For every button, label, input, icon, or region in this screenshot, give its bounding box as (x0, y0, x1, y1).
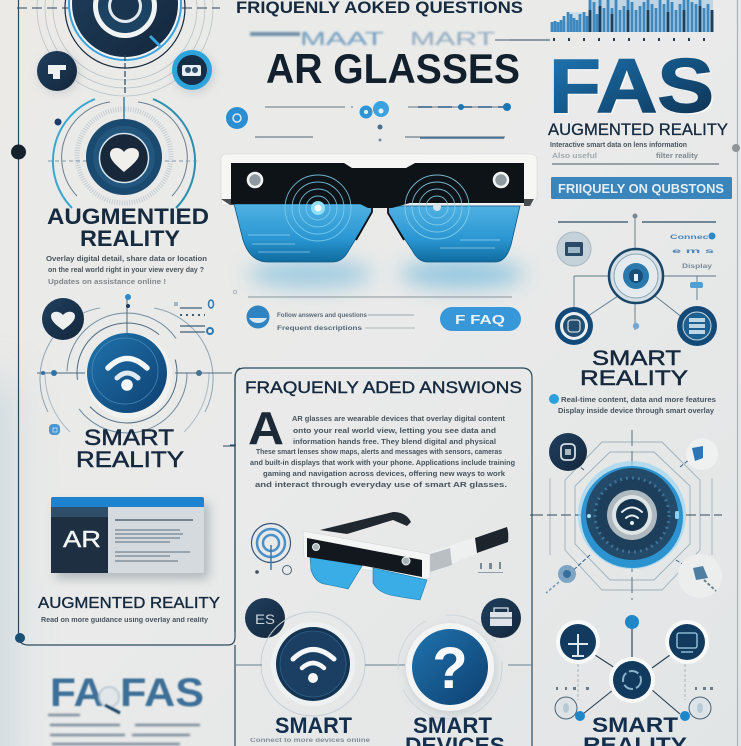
button: FAQ (440, 307, 521, 331)
heading: FAQ FAS: FA (50, 671, 104, 715)
heading: smart reality left: SMART (84, 425, 174, 450)
text block: answer paragraph: onto your real world view, letting you see data and (293, 426, 496, 435)
icon: ES badge (245, 598, 285, 638)
icon: pale monitor (557, 232, 591, 266)
drop capital A: A (248, 402, 284, 454)
heading: smart: SMART (275, 713, 353, 738)
lens data lines (248, 235, 500, 252)
icon: FAQ row disc (246, 306, 270, 328)
right lens (388, 206, 520, 262)
icon: smart reality wifi hub (37, 294, 232, 433)
glasses: small AR glasses (303, 512, 508, 600)
icon: hub badge pale bottom right (678, 554, 722, 598)
text block: augmented reality: Overlay digital detail, share data or location (46, 254, 207, 263)
nose bridge edges (356, 206, 404, 240)
text block: answer paragraph: AR glasses are wearable devices that overlay digital content (292, 414, 505, 423)
heading: augmented reality card: AUGMENTED REALITY (38, 595, 220, 612)
icon: right node (677, 306, 717, 346)
FAQ row (233, 290, 521, 332)
heading: smart devices (405, 713, 505, 746)
labels: network notes (670, 232, 716, 288)
text block: answer paragraph: and built-in displays that work with your phone. Applications include training (250, 458, 515, 467)
icon: drawer badge (481, 598, 521, 638)
icon: hub badge dark (549, 433, 587, 471)
hub circuitry (550, 442, 712, 590)
black band (307, 538, 422, 577)
diagram: bottom right network (555, 615, 713, 721)
heading: smart reality left: REALITY (76, 447, 184, 472)
heart hub rings (48, 97, 200, 208)
card text lines (115, 520, 193, 561)
banner: frequently questions: FRIIQUELY ON QUBSTONS (558, 182, 724, 196)
left holographic rings (285, 175, 351, 241)
text: smart caption: Connect to more devices online (250, 738, 371, 744)
frame node dots (11, 144, 740, 643)
icon: central lock (609, 249, 663, 303)
far temple (320, 512, 411, 534)
wifi symbol (108, 358, 147, 378)
button: FAQ: F FAQ (455, 312, 505, 327)
heading: augmented reality right: AUGMENTED REALITY (548, 120, 728, 139)
right holographic rings (405, 175, 469, 239)
text block: right: Interactive smart data on lens information (550, 140, 687, 149)
text block: FAQ FAS faint (48, 715, 200, 744)
heading: frequently answers: FRAQUENLY ADED ANSWIONS (245, 378, 522, 397)
heading: smart reality bottom right: SMART (592, 714, 678, 737)
labels: network notes: Connect (670, 234, 713, 241)
text block: answer paragraph (250, 414, 515, 489)
heading: smart reality left (76, 425, 184, 472)
tiny node labels (556, 687, 713, 690)
icon: ES badge: ES (255, 611, 275, 627)
heading: augmented reality: REALITY (80, 226, 180, 251)
faded subtitle: MAAT (300, 29, 384, 49)
heading: smart reality right: REALITY (580, 367, 688, 390)
icon: signal rings (252, 524, 292, 574)
small blue dots (54, 107, 248, 129)
icon: wifi disc (235, 612, 405, 716)
node: small left (555, 697, 585, 721)
heading: smart reality right: SMART (592, 347, 681, 370)
icon: smart hub bottom right (533, 430, 722, 600)
panel: top-left lens hub (17, 0, 220, 96)
text block: answer paragraph: These smart lenses show maps, alerts and messages with sensors, cameras (256, 447, 502, 456)
text block: augmented reality (46, 254, 207, 286)
hub scale lines (37, 0, 213, 96)
icon: small heart badge (42, 298, 84, 340)
text: FAQ row: Follow answers and questions (277, 312, 367, 319)
text block: answer paragraph: and interact through everyday use of smart AR glasses. (255, 480, 507, 489)
heading: FAS: FAS (549, 44, 714, 129)
text block: smart reality right: Real-time content, data and more features (561, 395, 716, 404)
icon: hub badge pale bottom left (546, 565, 576, 593)
text block: right: Also useful (552, 151, 597, 160)
text: FAQ row: Frequent descriptions (277, 325, 362, 332)
card: AR (51, 497, 209, 579)
faded subtitle: MART (410, 29, 495, 49)
banner: frequently questions (551, 177, 732, 199)
text block: answer paragraph: information hands free. They blend digital and physical (293, 437, 496, 446)
lenses (310, 556, 362, 589)
icon: hub badge pale top (686, 438, 718, 470)
text block: smart reality right: Display inside device through smart overlay (558, 406, 715, 415)
frame (221, 154, 537, 205)
heading: smart devices: SMART (413, 713, 493, 738)
glasses: large AR glasses (221, 154, 537, 288)
icon: question mark disc: ? (432, 636, 468, 701)
text block: answer paragraph: gaming and navigation across devices, offering new ways to work (263, 469, 506, 478)
heading: FAS: FAS (551, 46, 716, 131)
text: FAQ row (277, 312, 415, 332)
icon: dark badge (37, 51, 79, 93)
heading: augmented reality: AUGMENTIED (47, 204, 209, 229)
text block: augmented reality: Updates on assistance online ! (48, 277, 166, 286)
chart: bar chart (552, 0, 714, 40)
heading: smart reality bottom right (583, 714, 687, 746)
node: small right (680, 697, 711, 721)
heading: augmented reality (47, 204, 209, 251)
labels: network notes: Display (682, 263, 712, 270)
text block: right: filter reality (656, 151, 699, 160)
left lens (234, 204, 372, 262)
node: center (609, 657, 655, 703)
icon: blue badge (172, 50, 214, 93)
labels: network notes: e m s (672, 248, 715, 255)
icon: left node (555, 307, 593, 345)
heading: FAQ FAS (50, 671, 204, 715)
node: right (665, 620, 709, 664)
text block: right (550, 140, 719, 164)
heading: smart reality right (580, 347, 688, 390)
title: AR glasses: AR GLASSES (266, 45, 520, 92)
faded subtitle (250, 29, 495, 49)
icon: heart hub (48, 97, 200, 208)
node: left (556, 620, 600, 664)
slider rows (255, 101, 511, 142)
camera rings (248, 173, 262, 187)
diagram: smart reality network (555, 214, 717, 346)
card label: AR (63, 526, 101, 552)
text: card caption: Read on more guidance using overlay and reality (41, 617, 208, 624)
small indicators (49, 300, 214, 435)
front frame (303, 531, 430, 580)
text block: augmented reality: on the real world right in your view every day ? (48, 265, 204, 274)
text block: smart reality right (549, 394, 716, 415)
black band (231, 163, 524, 208)
heading: FAQ FAS: FAS (120, 671, 204, 715)
icon: question mark disc (398, 615, 532, 719)
near temple (427, 527, 508, 573)
tiny marks (478, 562, 503, 573)
